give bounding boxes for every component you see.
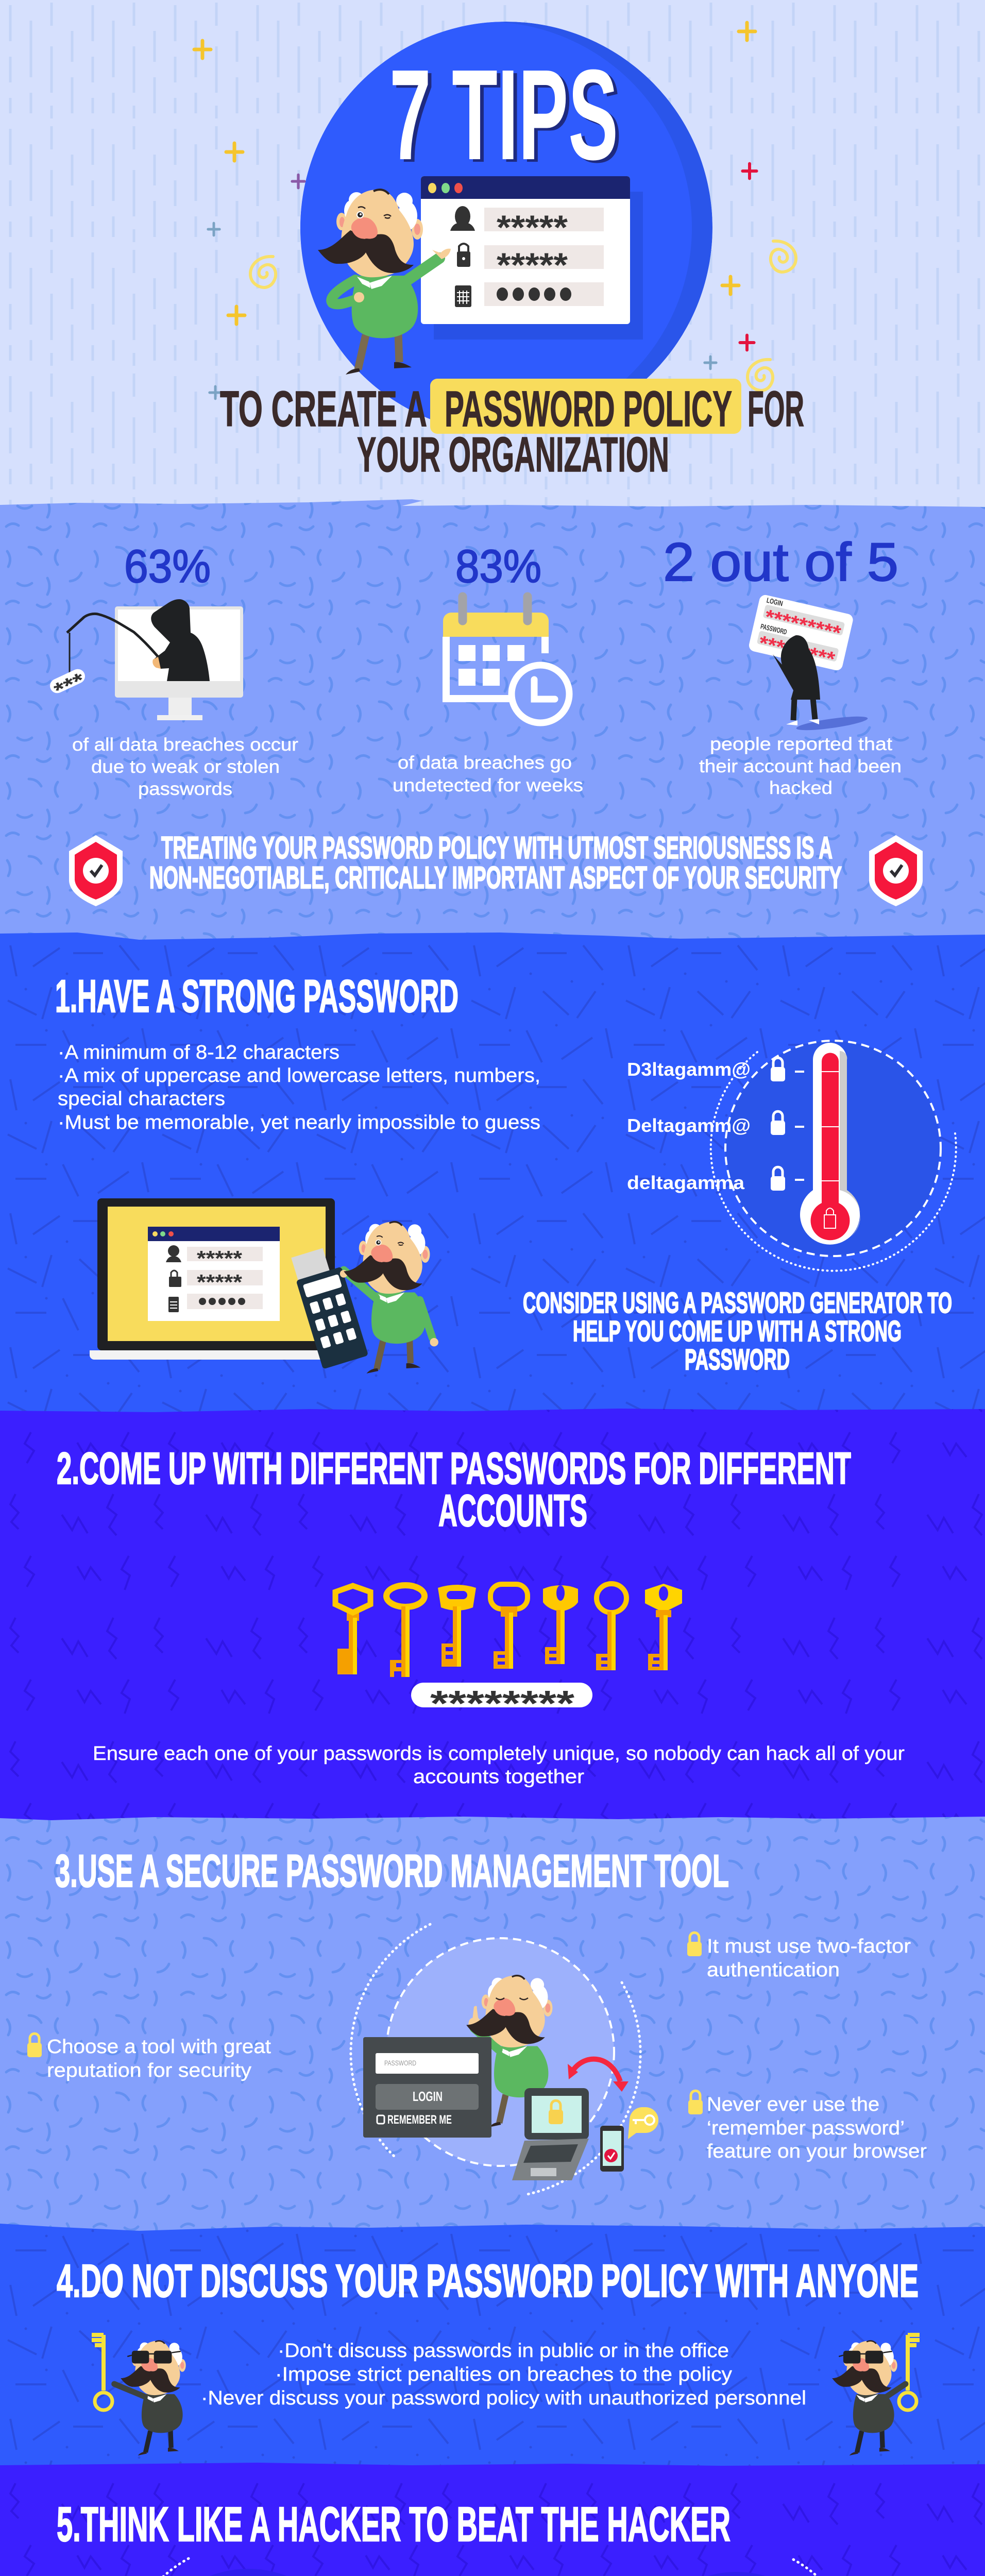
text: reputation: Choose a tool with great [47,2036,271,2058]
text: 83 percent caption: of data breaches go [398,753,572,773]
login window [421,176,643,340]
stat: 83 percent [393,541,583,795]
text: tip 4 bullets [201,2340,806,2409]
text: tip 4 bullets: ·Never discuss your password policy with unauthorized personnel [201,2387,806,2409]
character: papa with raised finger [466,1975,552,2127]
panel: tip 5 [0,2463,985,2576]
character: papa head, calculator scene [340,1222,430,1294]
panel: tip 4 [0,2224,985,2478]
subtitle: YOUR ORGANIZATION [357,427,669,482]
login panel: LOGIN [413,2089,443,2104]
icon: hacker with stolen login card: PASSWORD [760,622,788,636]
icon: calendar with clock [443,597,569,723]
password pill [411,1683,592,1723]
stat: 63 percent: 63% [124,541,211,592]
icon: calculator [289,1245,368,1369]
title: 7 tips: 7 TIPS [389,43,618,187]
heading: tip 1: 1.HAVE A STRONG PASSWORD [55,970,458,1022]
text: 63 percent caption [72,735,298,799]
text: reputation [27,2033,271,2081]
character: papa pointing at login window [318,190,451,375]
callout: password generator: PASSWORD [685,1343,790,1376]
heading: tip 2 [57,1444,851,1536]
text: tip 4 bullets: ·Impose strict penalties on breaches to the policy [275,2364,732,2385]
panel: tip 2 [0,1409,985,1834]
text: 63 percent caption: of all data breaches occur [72,735,298,755]
icon: hacker with stolen login card: LOGIN [766,596,784,607]
text: remember password: Never ever use the [707,2094,879,2115]
text: 83 percent caption [393,753,583,795]
icon: hacker with stolen login card [748,594,869,733]
thermometer diagram [627,1041,956,1271]
arrow: red rotation [568,2059,629,2092]
thermometer diagram: deltagamma [627,1172,745,1193]
icon: laptop with login window: ***** [197,1246,243,1270]
login panel [363,2037,491,2138]
text: two-factor: authentication [707,1959,840,1981]
text: tip 2 body: Ensure each one of your passwords is completely unique, so nobody can hack all of your [93,1743,905,1765]
icon: laptop with login window: ***** [197,1270,243,1294]
login panel: REMEMBER ME [387,2113,452,2127]
hero blue circle [280,22,712,434]
text: tip 1 bullets: special characters [58,1088,225,1110]
stat: 2 out of 5: 2 out of 5 [663,532,898,592]
login window: ***** [497,208,568,246]
text: two-factor [687,1933,911,1981]
scene: hacker cutting laptop chain [122,2558,376,2576]
text: 2 out of 5 caption: their account had been [699,756,902,776]
text: tip 2 body: accounts together [413,1766,584,1788]
stat: 63 percent [47,541,298,799]
diagram: password manager scene [351,1924,658,2194]
thermometer diagram: Deltagamm@ [627,1115,751,1136]
text: 2 out of 5 caption [699,734,902,798]
title: 7 tips: 7 TIPS [393,45,622,189]
icon: key speech bubble [628,2107,658,2139]
icon: mini laptop with lock [512,2088,589,2180]
text: tip 1 bullets [58,1042,540,1133]
subtitle: TO CREATE A [220,381,427,437]
text: tip 2 body [93,1743,905,1788]
icon: hacker with stolen login card: ********* [762,605,843,645]
panel: statistics [0,499,985,948]
text: tip 1 bullets: ·Must be memorable, yet nearly impossible to guess [58,1112,540,1133]
callout: treat seriously [149,831,842,895]
text: two-factor: It must use two-factor [707,1936,911,1957]
highlight box [430,379,741,434]
text: tip 1 bullets: ·A minimum of 8-12 characters [58,1042,339,1063]
text: 2 out of 5 caption: people reported that [710,734,892,754]
icon: laptop with login window [90,1198,343,1360]
text: remember password [688,2091,927,2162]
callout: password generator [523,1286,952,1376]
text: tip 1 bullets: ·A mix of uppercase and lowercase letters, numbers, [58,1065,540,1087]
text: tip 4 bullets: ·Don't discuss passwords in public or in the office [278,2340,729,2362]
subtitle: FOR [748,381,804,437]
text: 63 percent caption: passwords [138,779,232,799]
stat: 83 percent: 83% [455,541,541,592]
text: remember password: feature on your browser [707,2141,927,2162]
text: 2 out of 5 caption: hacked [769,778,833,798]
icon: shield left [69,835,123,906]
login window: ***** [497,246,568,284]
panel: hero header [0,0,985,515]
scene: hacker unlocking phone [608,2560,860,2576]
character: papa with calculator [344,1270,438,1374]
character: papa with key left [92,2335,186,2455]
text: reputation: reputation for security [47,2060,251,2081]
thermometer diagram: D3ltagamm@ [627,1059,751,1080]
panel: tip 3 [0,1817,985,2241]
password pill: ******** [430,1683,575,1723]
subtitle: PASSWORD POLICY [445,381,732,437]
icon: hacker fishing from monitor [47,599,243,720]
text: 63 percent caption: due to weak or stolen [91,757,280,777]
login panel: PASSWORD [384,2059,416,2067]
text: remember password: ‘remember password’ [707,2117,905,2139]
subtitle [220,381,804,482]
icon: shield right [869,835,923,906]
stat: 2 out of 5 [663,532,902,798]
icon: hacker with stolen login card: ********* [756,632,837,671]
heading: tip 2: ACCOUNTS [438,1486,587,1536]
icon: hacker fishing from monitor: *** [50,668,89,702]
text: 83 percent caption: undetected for weeks [393,775,583,795]
character: papa with key right [832,2335,920,2455]
icon: seven keys [335,1584,682,1677]
title: 7 tips [389,43,622,189]
decorative sparkles [194,23,796,399]
icon: phone with check [600,2126,624,2172]
panel: tip 1 [0,933,985,1427]
